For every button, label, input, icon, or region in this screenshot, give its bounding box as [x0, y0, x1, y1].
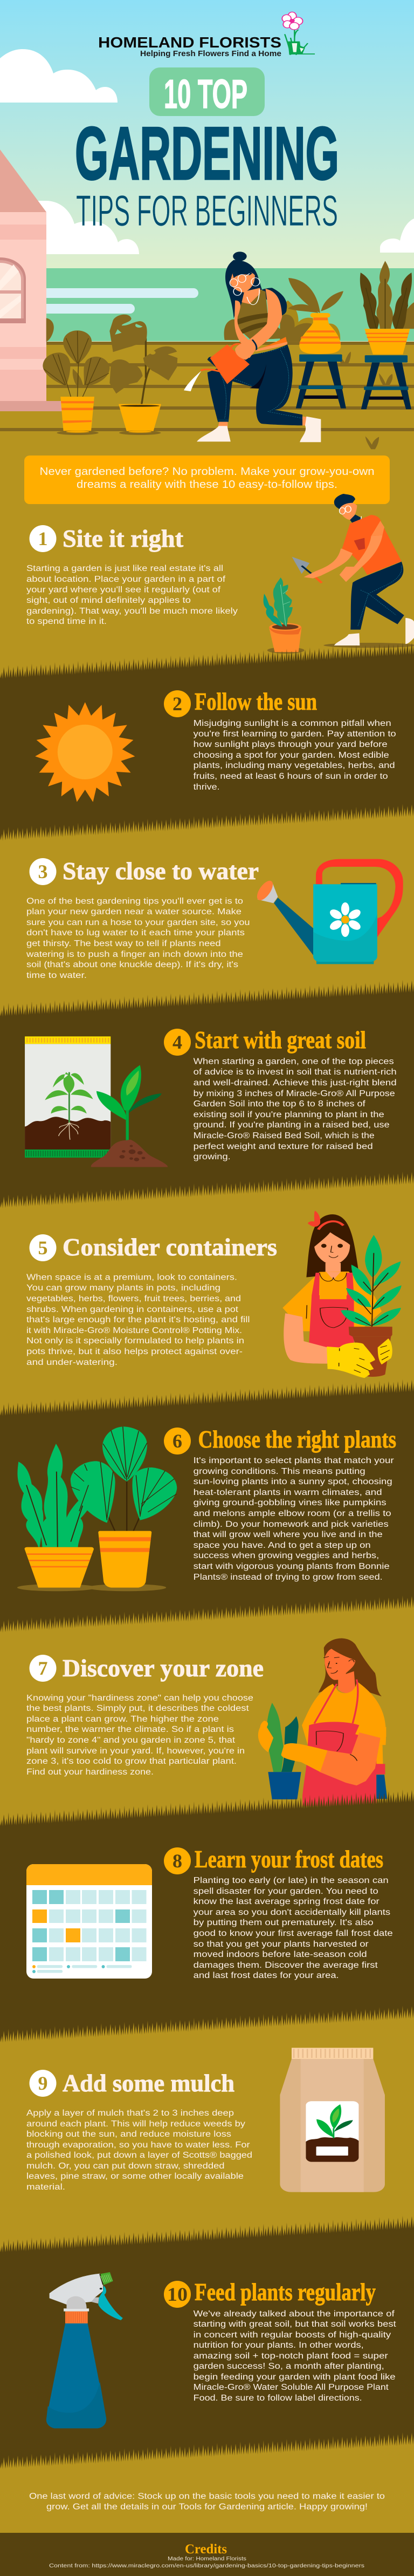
illustration: potted plants — [17, 1426, 177, 1591]
tip 3 body: plan your new garden near a water source. Make — [26, 907, 242, 916]
tip 6 body: space you have. And to get a step up on — [194, 1541, 371, 1550]
tip 3 body: One of the best gardening tips you'll ever get is to — [26, 897, 243, 906]
tip 9 body — [26, 2109, 252, 2192]
watering can — [210, 344, 250, 384]
tip 5 body — [26, 1273, 250, 1367]
intro callout: dreams a reality with these 10 easy-to-follow tips. — [77, 478, 337, 491]
tip 8 body: your area so you don't accidentally kill plants — [194, 1908, 391, 1917]
tip 2 body: thrive. — [194, 783, 220, 792]
tip 4 body: When starting a garden, one of the top pieces — [194, 1057, 394, 1066]
tip 5 body: vegetables, herbs, flowers, fruit trees, berries, and — [26, 1294, 241, 1303]
round plant — [105, 1481, 144, 1531]
tip 3 body: sure you can run a hose to your garden site, so you — [26, 918, 250, 927]
wavy plant — [17, 1444, 92, 1547]
tip 1 number badge: 1 — [38, 528, 47, 549]
tip 7 body: place a plant can grow. The higher the zone — [26, 1715, 219, 1724]
cloud: right — [380, 219, 414, 253]
tip 8 body: Planting too early (or late) in the season can — [194, 1876, 389, 1885]
tip 8 body: spell disaster for your garden. You need to — [194, 1887, 378, 1896]
tip 4 body: and well-drained. Achieve this just-right blend — [194, 1078, 397, 1088]
arm and gloves — [320, 1732, 381, 1785]
grass edge light — [0, 2431, 414, 2576]
hero illustration: plants, woman, stools (in crop coordinates) — [43, 252, 414, 442]
intro callout: Never gardened before? No problem. Make your grow-you-own — [40, 465, 374, 478]
icon: sun — [35, 702, 135, 802]
pots — [25, 1547, 94, 1588]
tip 3 body: don't have to lug water to it each time your plants — [26, 928, 245, 937]
tip 4 body: existing soil if you're planning to plant in the — [194, 1110, 384, 1119]
illustration: man with trowel and potted plant — [264, 494, 414, 654]
illustration: mulch bag — [280, 2048, 385, 2192]
tip 7 heading: Discover your zone — [63, 1654, 264, 1682]
tip 8 body: good to know your first average fall frost date — [194, 1929, 393, 1938]
tip 1 body — [26, 564, 238, 626]
tip 1 body: about location. Place your garden in a part of — [26, 575, 226, 584]
tip 2 body: Misjudging sunlight is a common pitfall when — [194, 719, 391, 728]
shirt — [235, 290, 288, 340]
tip 4 body: Miracle-Gro® Raised Bed Soil, which is the — [194, 1131, 375, 1140]
background bushes — [46, 301, 414, 386]
tip 10 body: nutrition for your plants. In other words, — [194, 2341, 364, 2350]
tip 5 number badge: 5 — [38, 1237, 47, 1259]
tip 9 body: around each plant. This will help reduce weeds by — [26, 2119, 245, 2129]
illustration: spray bottle — [46, 2272, 123, 2428]
plant — [267, 1703, 284, 1772]
tip 10 body: Food. Be sure to follow label directions. — [194, 2394, 362, 2403]
tip 2 body: plants, including many vegetables, herbs, and — [194, 761, 395, 770]
closing advice text: One last word of advice: Stock up on the basic tools you need to make it easier to — [29, 2492, 385, 2501]
tip 7 body: "hardy to zone 4" and you garden in zone 5, that — [26, 1736, 236, 1745]
potted monstera — [109, 315, 177, 406]
tip 10 body: Miracle-Gro® Water Soluble All Purpose Plant — [194, 2383, 389, 2392]
tip 7 body: Find out your hardiness zone. — [26, 1768, 154, 1777]
tip 2 number badge: 2 — [172, 693, 182, 715]
tip 10 heading: Feed plants regularly — [195, 2278, 376, 2306]
tip 9 body: a polished look, put down a layer of Scotts® bagged — [26, 2151, 252, 2160]
clouds: flat streaks — [38, 288, 198, 314]
pot — [269, 627, 302, 652]
tip 7 body: number, the warmer the climate. So if a plant is — [26, 1725, 234, 1734]
tip 2 body: how sunlight plays through your yard before — [194, 740, 388, 749]
tip 8 body: by putting them out prematurely. It's also — [194, 1918, 374, 1927]
tip 8 body: moved indoors before late-season cold — [194, 1950, 367, 1959]
tip 8 number badge: 8 — [172, 1850, 182, 1872]
tip 7 body: zone 3, it's too cold to grow that particular plant. — [26, 1757, 237, 1766]
tip 7 body: Knowing your "hardiness zone" can help you choose — [26, 1694, 253, 1703]
shoes — [218, 417, 309, 427]
tip 6 body: and melons ample elbow room (or a trellis to — [194, 1509, 391, 1518]
grass edge dark — [0, 978, 414, 1248]
grass edge light — [0, 1594, 414, 1864]
tip 5 body: pots thrive, but it also helps protect against over- — [26, 1347, 243, 1356]
tip 1 — [26, 494, 414, 654]
tip 9 body: mulch. Or, you can put down straw, shredded — [26, 2162, 224, 2171]
tip 4 body: Garden Soil into the top 6 to 8 inches of — [194, 1099, 366, 1109]
tip 8 body: so that you get your plants harvested or — [194, 1940, 369, 1949]
tip 6 body: that will grow well where you live and in the — [194, 1530, 383, 1539]
stool right — [361, 355, 411, 409]
potted palm plant — [43, 330, 110, 431]
cloud: behind house — [32, 201, 139, 254]
tip 10 body: We've already talked about the importance of — [194, 2309, 395, 2319]
tip 7 number badge: 7 — [38, 1657, 47, 1679]
tip 7 body: plant will survive in your yard. If, however, you're in — [26, 1746, 245, 1756]
tip 10 number badge: 10 — [167, 2283, 188, 2305]
tip 9 number badge — [29, 2070, 56, 2097]
tip 5 body: When space is at a premium, look to containers. — [26, 1273, 237, 1282]
grass edge dark — [0, 641, 414, 910]
tip 5 body: You can grow many plants in pots, including — [26, 1283, 220, 1293]
tip 5 body: shrubs. When gardening in containers, use a pot — [26, 1305, 239, 1314]
pants — [208, 344, 302, 425]
tip 4 body: growing. — [194, 1152, 231, 1161]
tip 3 body — [26, 897, 250, 980]
tip 10 body: garden success! So, a month after planting, — [194, 2362, 384, 2371]
tip 9 heading: Add some mulch — [63, 2069, 234, 2097]
panel: tip 2 — [0, 641, 414, 910]
tip 1 body: sight, out of mind definitely applies to — [26, 596, 191, 605]
panel: tip 5 — [0, 1170, 414, 1440]
tip 6 number badge — [164, 1428, 191, 1454]
tip 7 body — [26, 1694, 253, 1777]
seedling — [121, 1065, 141, 1112]
tip 4 body: ground. If you're planting in a raised bed, use — [194, 1120, 390, 1130]
shadows under hero pots — [57, 431, 379, 449]
grass edge dark — [0, 1378, 414, 1648]
tip 4 body: of advice is to invest in soil that is nutrient-rich — [194, 1068, 397, 1077]
tip 8 body: damages them. Discover the average first — [194, 1961, 378, 1970]
grass edge dark — [0, 1788, 414, 2058]
tip 1 heading: Site it right — [63, 525, 184, 552]
tip 5 number badge — [29, 1234, 56, 1261]
credits heading: Credits — [185, 2542, 227, 2557]
tip 5 body: that's large enough for the plant it's hosting, and fill — [26, 1315, 250, 1324]
tip 5 body: and under-watering. — [26, 1358, 118, 1367]
credits source: Content from: https://www.miraclegro.com/en-us/library/gardening-basics/10-top-gardening-tips-beginners — [49, 2563, 364, 2569]
pot and gloves — [349, 1327, 392, 1337]
tip 6 body: giving ground-gobbling vines like pumpkins — [194, 1498, 387, 1507]
tip 2 body: choosing a spot for your garden. Most edible — [194, 751, 389, 760]
tip 9 number badge: 9 — [38, 2072, 47, 2094]
tip 6 body: heat-tolerant plants in warm climates, and — [194, 1488, 382, 1497]
tip 6 body: Plants® instead of trying to grow from seed. — [194, 1573, 383, 1582]
logo: wordmark: HOMELAND FLORISTS — [98, 34, 281, 51]
plant — [341, 1235, 402, 1326]
tip 4 heading: Start with great soil — [195, 1026, 366, 1053]
tip 2 body: fruits, need at least 6 hours of sun in order to — [194, 772, 388, 781]
tip 4 number badge — [164, 1029, 191, 1056]
tip 9 body: leaves, pine straw, or some other locally available — [26, 2172, 244, 2181]
tip 2 heading: Follow the sun — [195, 688, 317, 715]
title badge: 10 TOP — [149, 67, 265, 117]
arm — [284, 1313, 328, 1364]
intro callout — [24, 456, 390, 504]
panel: tip 7 — [0, 1594, 414, 1864]
grass edge light — [0, 803, 414, 1072]
tip 2 body: you're first learning to garden. Pay attention to — [194, 730, 396, 739]
tip 3 body: soil (that's about one knuckle deep). If it's dry, it's — [26, 960, 238, 969]
tip 10 body: in concert with regular boosts of high-quality — [194, 2330, 391, 2340]
tip 6 body: success when growing veggies and herbs, — [194, 1551, 379, 1560]
tip 9 body: Apply a layer of mulch that's 2 to 3 inches deep — [26, 2109, 234, 2118]
cloud: top left — [0, 49, 118, 103]
shoes — [334, 633, 360, 645]
icon: watering can — [254, 859, 403, 964]
fence stripes — [0, 342, 414, 431]
stool left — [296, 355, 346, 409]
grass edge light — [0, 2004, 414, 2274]
tip 6 body: start with vigorous young plants from Bonnie — [194, 1562, 390, 1571]
pot with wavy plant — [360, 261, 412, 355]
house — [0, 149, 62, 411]
illustration: soil bag and seedling — [25, 1036, 168, 1167]
tip 10 number badge — [164, 2281, 191, 2308]
tip 8 number badge — [164, 1847, 191, 1874]
woman watering — [184, 252, 321, 442]
logo: tagline: Helping Fresh Flowers Find a Home — [140, 50, 281, 58]
tip 1 body: to spend time in it. — [26, 617, 107, 626]
hair and face — [340, 502, 357, 520]
panel: tip 8 — [0, 1788, 414, 2058]
panel: tip 10 — [0, 2214, 414, 2484]
title — [75, 67, 339, 235]
tip 8 body: know the last average spring frost date for — [194, 1897, 380, 1906]
shirt and apron — [282, 1272, 382, 1331]
tip 10 body: amazing soil + top-notch plant food = super — [194, 2351, 388, 2361]
tip 2 number badge — [164, 690, 191, 717]
tip 1 body: Starting a garden is just like real estate it's all — [26, 564, 223, 573]
tip 8 body: and last frost dates for your area. — [194, 1971, 339, 1980]
title badge: 10 TOP: 10 TOP — [164, 71, 247, 117]
logo — [98, 12, 315, 58]
grass edge dark — [0, 2214, 414, 2484]
trowel — [292, 557, 309, 574]
pants — [350, 562, 404, 630]
tip 3 number badge — [29, 858, 56, 885]
tip 1 body: gardening). That way, you'll be much more likely — [26, 607, 238, 616]
tip 3 heading: Stay close to water — [63, 857, 259, 885]
panel: tip 6 — [0, 1378, 414, 1648]
tip 6 body: climb). Do your homework and pick varieties — [194, 1520, 389, 1529]
tip 8 body — [194, 1876, 393, 1980]
tip 3 body: watering is to push a finger an inch down into the — [26, 950, 243, 959]
vase with plant — [288, 278, 343, 354]
illustration: woman with apron and potted plant — [258, 1639, 387, 1806]
tip 3 body: time to water. — [26, 971, 87, 980]
tip 6 number badge: 6 — [172, 1430, 182, 1452]
tip 10 body — [194, 2309, 397, 2403]
illustration: woman holding potted plant — [282, 1211, 402, 1378]
tip 3 body: get thirsty. The best way to tell if plants need — [26, 939, 221, 948]
panel: tip 3 — [0, 803, 414, 1072]
tip 9 body: material. — [26, 2183, 65, 2192]
credits footer — [0, 2533, 414, 2576]
tip 4 body: by mixing 3 inches of Miracle-Gro® All Purpose — [194, 1089, 395, 1098]
tip 6 body: It's important to select plants that match your — [194, 1456, 394, 1465]
tip 5 heading: Consider containers — [63, 1233, 277, 1261]
calendar legend — [32, 1965, 132, 1973]
tip 9 body: through evaporation, so you have to water less. For — [26, 2140, 250, 2150]
pot soil rim — [119, 404, 161, 432]
tip 4 body — [194, 1057, 397, 1161]
tip 6 body: growing conditions. This means putting — [194, 1467, 365, 1476]
shirt — [342, 515, 402, 575]
panel: tip 4 — [0, 978, 414, 1248]
tip 5 body: it with Miracle-Gro® Moisture Control® Potting Mix. — [26, 1326, 242, 1335]
tip 10 body: starting with great soil, but that soil works best — [194, 2320, 397, 2329]
closing advice text — [29, 2492, 385, 2512]
tip 4 number badge: 4 — [172, 1031, 182, 1053]
tip 4 body: perfect weight and texture for raised bed — [194, 1142, 373, 1151]
tip 2 body — [194, 719, 396, 792]
tip 6 body — [194, 1456, 394, 1582]
tip 1 number badge — [29, 525, 56, 552]
arms — [304, 549, 353, 579]
tip 5 body: Not only is it specially formulated to help plants in — [26, 1336, 244, 1345]
panel: tip 9 — [0, 2004, 414, 2274]
tip 9 body: blocking out the sun, and reduce moisture loss — [26, 2130, 231, 2139]
tip 7 number badge — [29, 1655, 56, 1682]
closing panel — [0, 2431, 414, 2576]
skin — [234, 301, 250, 347]
tip 7 body: the best plants. Simply put, it describes the coldest — [26, 1704, 249, 1713]
grass edge light — [0, 1170, 414, 1440]
tip 1 body: your yard where you'll see it regularly (out of — [26, 586, 221, 595]
credits made for: Made for: Homeland Florists — [168, 2556, 246, 2562]
closing advice text: grow. Get all the details in our Tools for Gardening article. Happy growing! — [46, 2503, 368, 2512]
tip 10 body: begin feeding your garden with plant food like — [194, 2373, 396, 2382]
illustration: calendar — [26, 1864, 152, 1979]
tip 6 body: sun-loving plants into a sunny spot, choosing — [194, 1477, 392, 1486]
tip 3 number badge: 3 — [38, 861, 47, 882]
logo: flower icon — [282, 12, 315, 55]
